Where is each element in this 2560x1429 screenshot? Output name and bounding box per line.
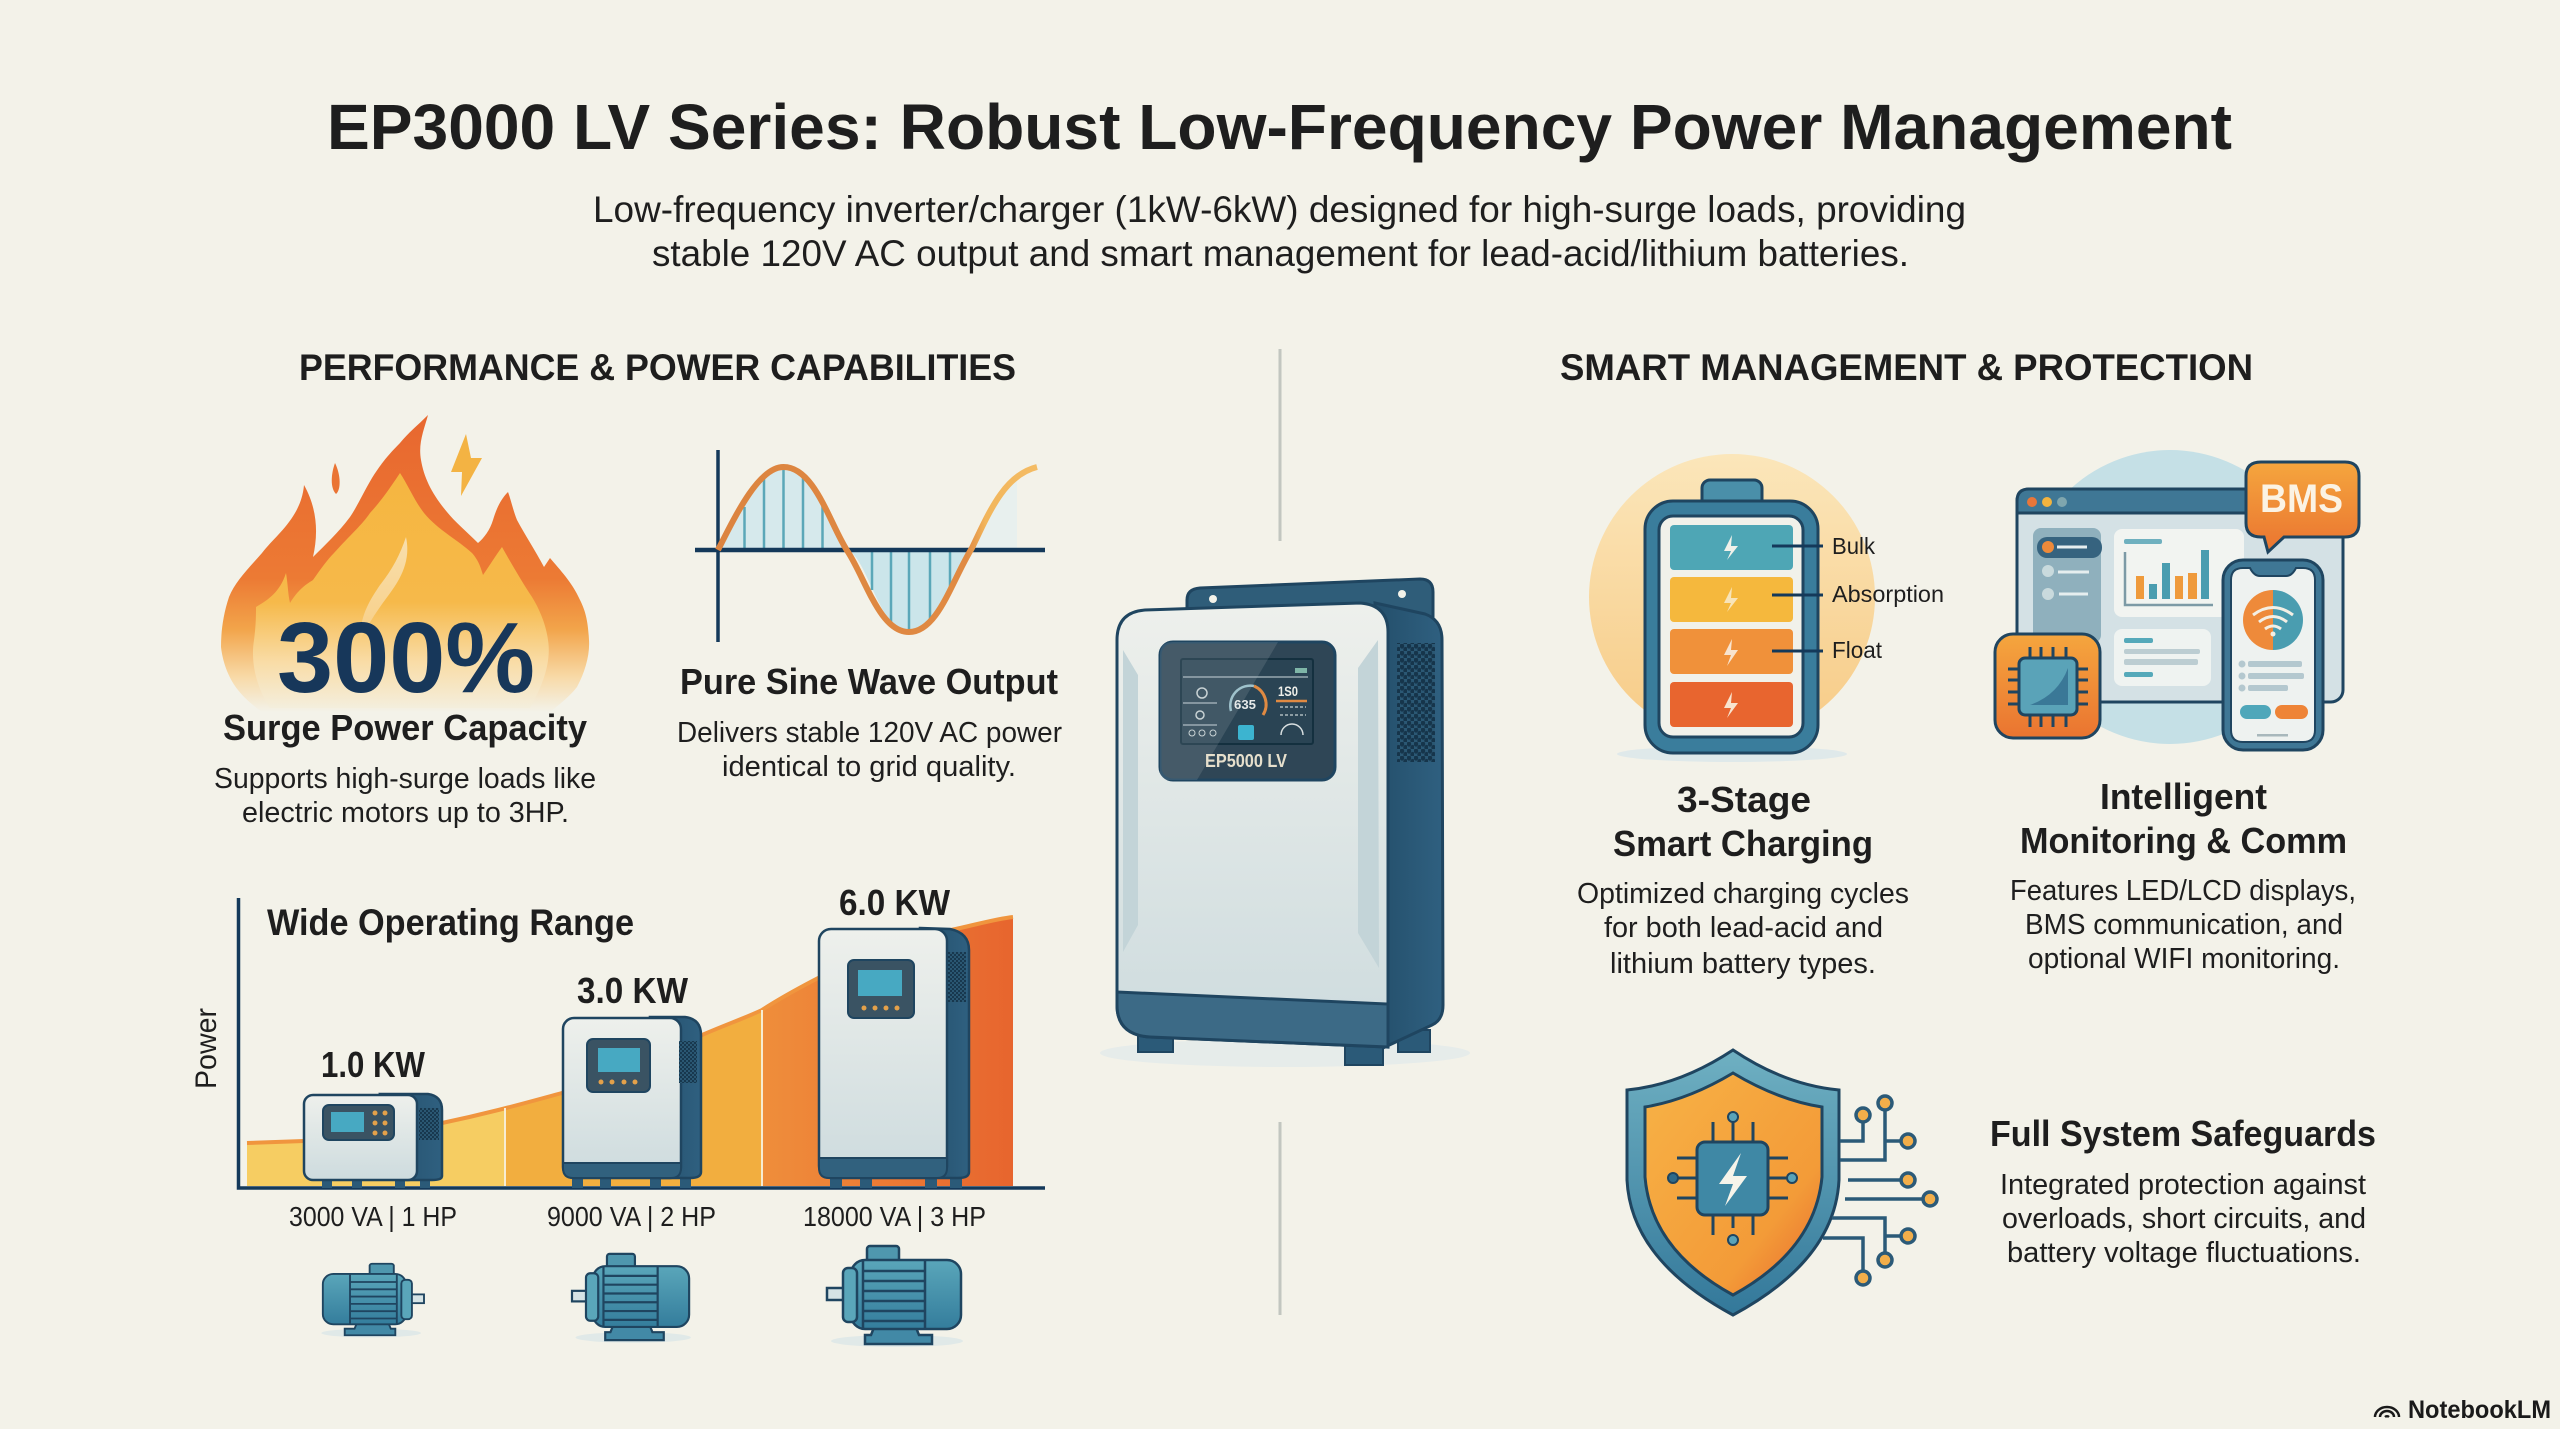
circuit traces	[1823, 1096, 1937, 1285]
text block: 3-stage smart charging: lithium battery types.	[1610, 948, 1876, 980]
display panel: 1S0	[1278, 683, 1298, 699]
icon: battery	[1589, 454, 1944, 762]
label: 1.0 kW: 1.0 KW	[321, 1044, 425, 1085]
inverter: 3.0 kW	[563, 1017, 701, 1188]
text block: intelligent monitoring: BMS communication, and	[2025, 909, 2343, 941]
text block: intelligent monitoring: Intelligent	[2100, 776, 2267, 817]
inverter: 6.0 kW	[819, 928, 969, 1188]
display panel: 635	[1234, 697, 1256, 712]
display panel	[1160, 642, 1335, 780]
chart: wide operating range	[190, 882, 1045, 1188]
text block: full system safeguards: overloads, short circuits, and	[2002, 1203, 2366, 1235]
heading: smart management: SMART MANAGEMENT & PROTECTION	[1560, 347, 2253, 388]
text block: 3-stage smart charging: Smart Charging	[1613, 823, 1873, 864]
text block: intelligent monitoring: Features LED/LCD displays,	[2010, 875, 2356, 907]
icon: motor large	[827, 1246, 963, 1347]
text block: pure sine wave	[677, 661, 1062, 783]
phone	[2223, 560, 2323, 750]
label: 9000 VA: 9000 VA | 2 HP	[547, 1201, 716, 1232]
axis label: power: Power	[190, 1008, 223, 1089]
text block: surge power capacity	[214, 707, 596, 829]
text block: intelligent monitoring: Monitoring & Comm	[2020, 820, 2347, 861]
icon: surge flame	[221, 415, 589, 712]
icon: monitoring dashboard	[1995, 450, 2359, 750]
text block: pure sine wave: Delivers stable 120V AC power	[677, 717, 1062, 749]
text block: pure sine wave: Pure Sine Wave Output	[680, 661, 1058, 702]
heading: wide operating range: Wide Operating Range	[267, 902, 634, 943]
text block: pure sine wave: identical to grid quality.	[722, 751, 1016, 783]
area: power curve	[247, 917, 1013, 1186]
text block: full system safeguards: Integrated protection against	[2000, 1169, 2366, 1201]
icon: notebook logo	[2375, 1407, 2399, 1417]
icon: motor medium	[572, 1254, 691, 1343]
text block: surge power capacity: Surge Power Capacity	[223, 707, 587, 748]
callout: BMS: BMS	[2260, 477, 2343, 521]
subtitle: Low-frequency inverter/charger (1kW-6kW) designed for high-surge loads, providing	[593, 189, 1966, 230]
illustration: main inverter	[1100, 579, 1470, 1067]
label: 6.0 kW: 6.0 KW	[839, 882, 950, 923]
text block: intelligent monitoring: optional WIFI monitoring.	[2028, 943, 2340, 975]
watermark: NotebookLM: NotebookLM	[2408, 1396, 2551, 1424]
text block: full system safeguards	[1990, 1113, 2376, 1269]
callout: BMS	[2246, 462, 2359, 552]
label: bulk: Bulk	[1832, 533, 1875, 559]
display panel: EP5000 LV	[1205, 751, 1287, 771]
label: float: Float	[1832, 637, 1883, 663]
title: EP3000 LV Series: Robust Low-Frequency Power Management	[327, 91, 2232, 163]
text block: 3-stage smart charging: for both lead-acid and	[1604, 912, 1883, 944]
text block: full system safeguards: battery voltage fluctuations.	[2007, 1237, 2361, 1269]
label: 18000 VA: 18000 VA | 3 HP	[803, 1201, 986, 1232]
label: 3.0 kW: 3.0 KW	[577, 970, 688, 1011]
chart: sine wave	[695, 450, 1045, 642]
stat: 300%: 300%	[277, 602, 535, 714]
subtitle	[593, 189, 1966, 274]
text block: 3-stage smart charging: 3-Stage	[1677, 779, 1811, 820]
inverter: 1.0 kW	[304, 1094, 442, 1188]
subtitle: stable 120V AC output and smart management for lead-acid/lithium batteries.	[652, 233, 1909, 274]
text block: 3-stage smart charging: Optimized charging cycles	[1577, 878, 1909, 910]
icon: shield	[1627, 1050, 1937, 1315]
icon: motor small	[321, 1264, 424, 1337]
icon: chip tile	[1995, 634, 2100, 738]
label: 3000 VA: 3000 VA | 1 HP	[289, 1201, 457, 1232]
heading: performance: PERFORMANCE & POWER CAPABILITIES	[299, 347, 1016, 388]
text block: surge power capacity: Supports high-surge loads like	[214, 763, 596, 795]
text block: surge power capacity: electric motors up to 3HP.	[242, 797, 569, 829]
text block: 3-stage smart charging	[1577, 779, 1909, 980]
browser window	[2017, 489, 2343, 702]
label: absorption: Absorption	[1832, 581, 1944, 607]
text block: intelligent monitoring	[2010, 776, 2356, 975]
text block: full system safeguards: Full System Safeguards	[1990, 1113, 2376, 1154]
